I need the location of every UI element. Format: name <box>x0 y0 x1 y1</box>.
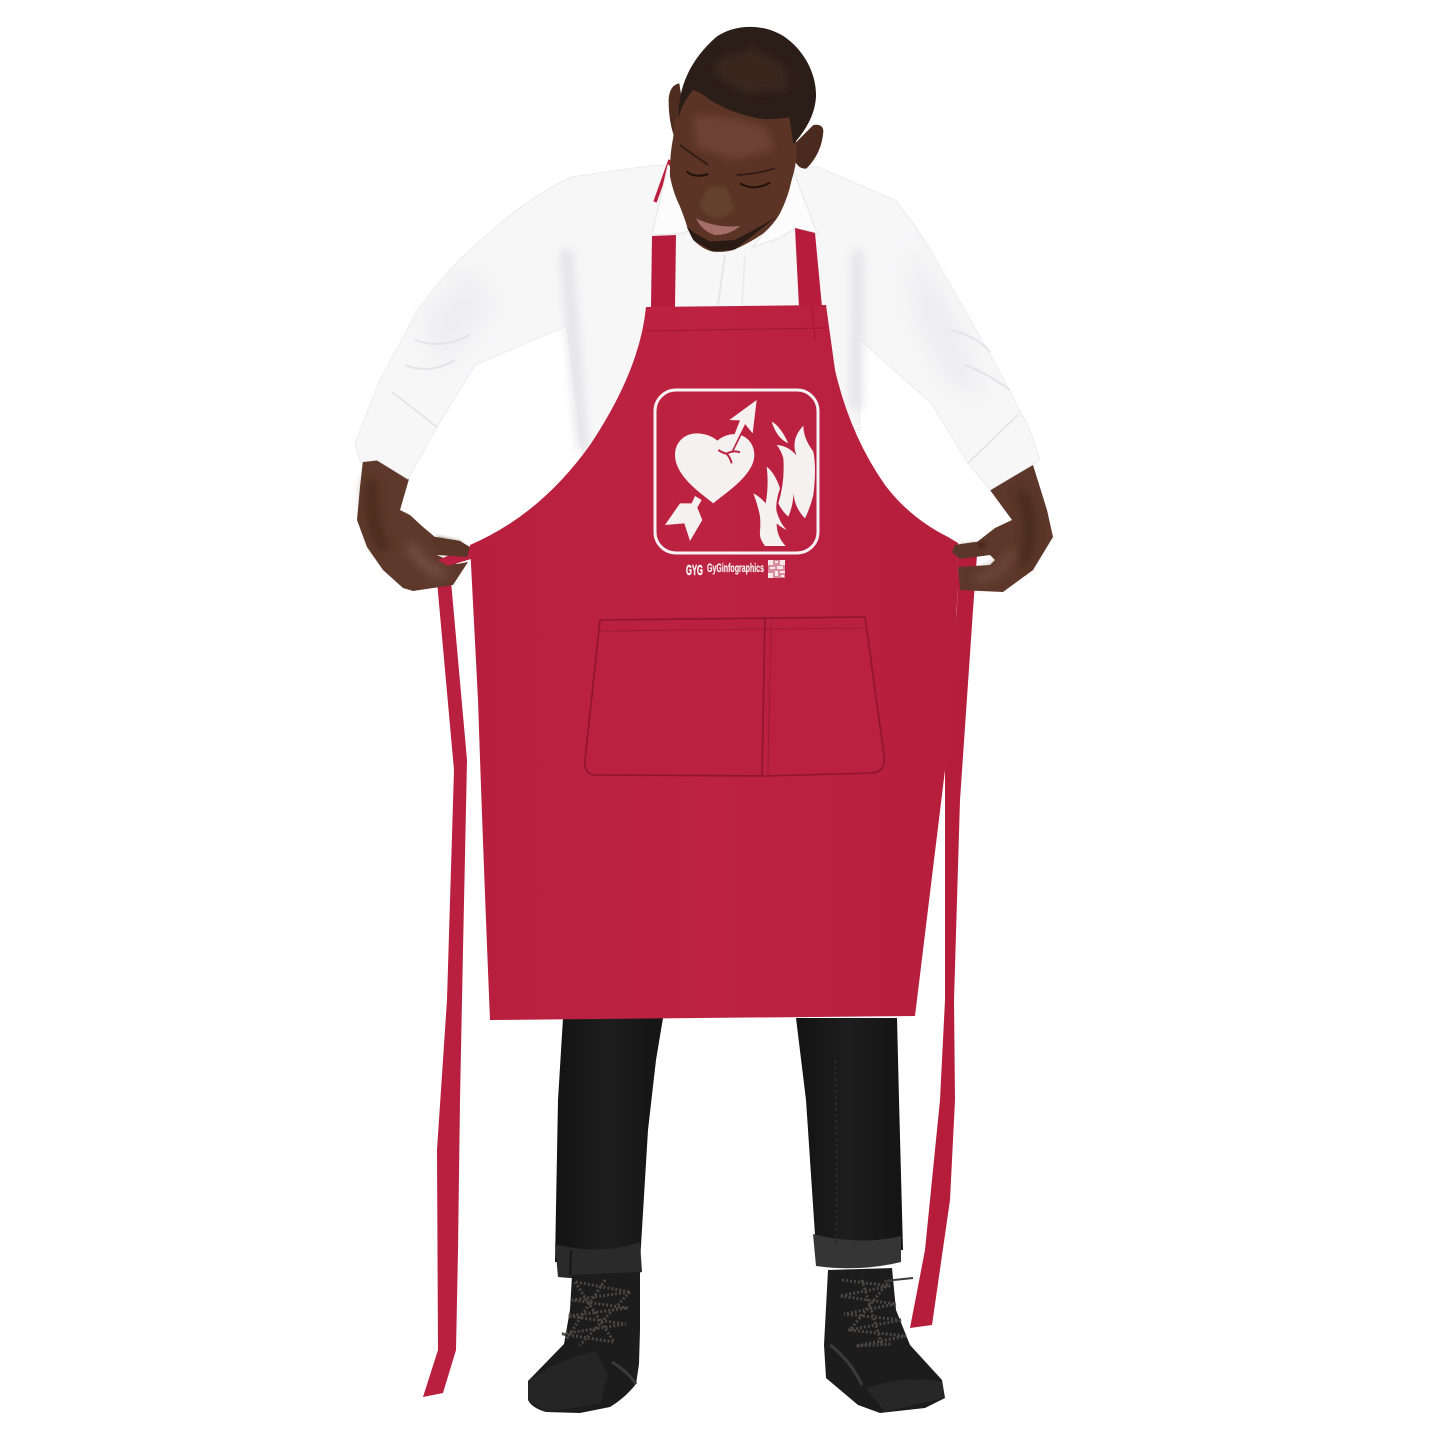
left leg <box>555 1018 663 1279</box>
face <box>670 70 797 252</box>
white shirt <box>355 165 1040 490</box>
left ear <box>669 83 685 136</box>
icon: flame <box>753 422 815 546</box>
hair <box>678 27 816 144</box>
chin beard <box>687 217 777 252</box>
arrow shaft outline <box>732 427 744 452</box>
heart <box>675 433 754 503</box>
finger pinch red band <box>438 546 471 566</box>
right thumb over apron edge <box>952 542 985 559</box>
arrow notch in heart <box>718 450 740 463</box>
nose <box>700 187 734 218</box>
neck strap behind collar <box>655 160 670 202</box>
apron tie: left <box>423 570 467 1397</box>
forehead highlight <box>693 116 773 160</box>
eyes <box>687 172 770 187</box>
arrow fletching <box>665 496 702 541</box>
apron tie: right <box>910 550 977 1328</box>
apron body <box>470 305 958 1020</box>
hair sheen <box>717 48 787 93</box>
right boot <box>824 1268 945 1413</box>
apron pocket <box>585 617 884 776</box>
right ear <box>795 125 823 169</box>
head <box>669 27 823 252</box>
printed emblem <box>655 390 818 579</box>
apron neck straps <box>651 228 822 307</box>
brand logo mark: GYG <box>686 562 703 579</box>
emblem frame <box>655 390 818 553</box>
icon: heart pierced by arrow <box>665 400 757 541</box>
left thumb over apron edge <box>435 537 470 557</box>
arrow head and shaft <box>728 400 757 452</box>
left boot <box>528 1272 640 1413</box>
right leg <box>796 1018 903 1268</box>
brand name: GyGinfographics <box>707 563 764 575</box>
left forearm and hand <box>357 458 468 591</box>
mouth <box>696 218 740 235</box>
QR code <box>768 560 785 578</box>
collar <box>652 165 817 247</box>
right forearm and hand <box>953 465 1053 592</box>
eyebrows <box>680 145 775 175</box>
